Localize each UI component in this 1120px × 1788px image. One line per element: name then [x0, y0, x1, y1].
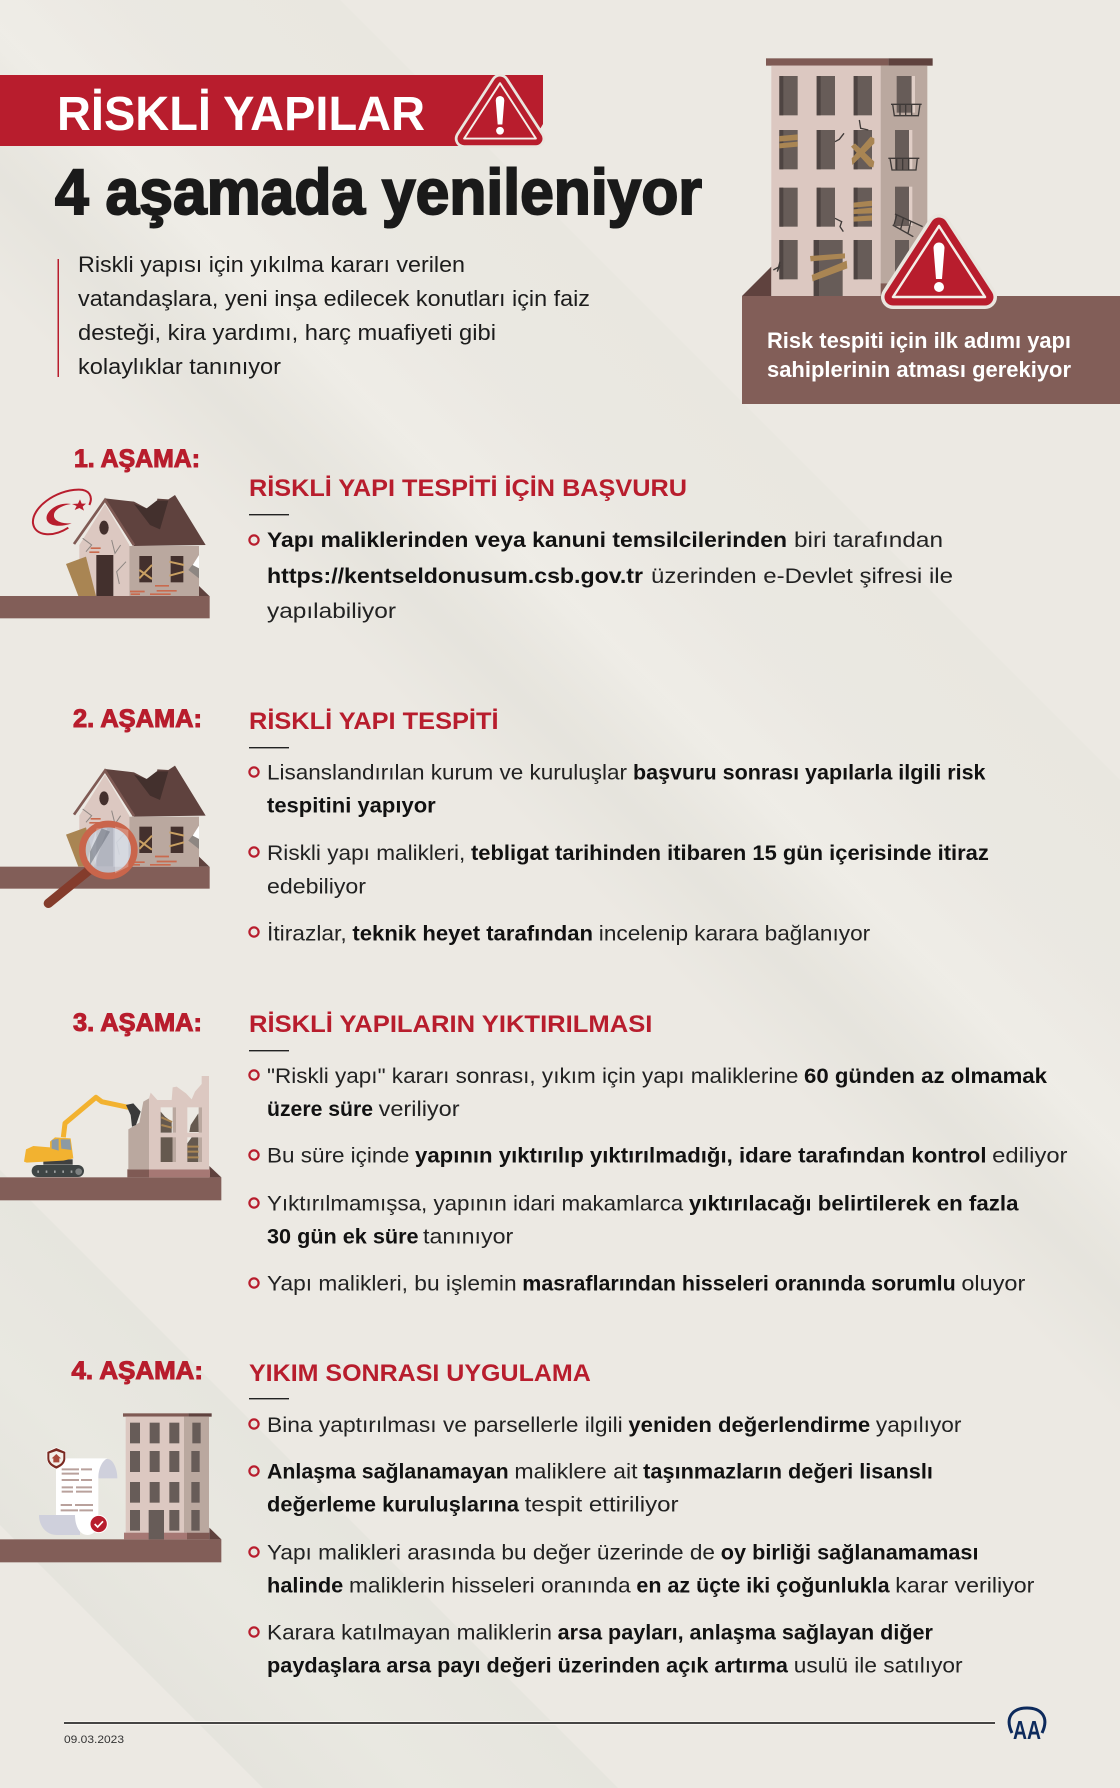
illustration: stage 2 house under magnifier — [0, 766, 210, 903]
step 4 text block: taşınmazların değeri lisanslı — [643, 1460, 933, 1484]
step 1 text block — [249, 528, 953, 623]
step 3 text block: Yapı malikleri, bu işlemin — [267, 1271, 517, 1295]
illustration: damaged apartment building — [742, 58, 933, 296]
step 2 text block: incelenip karara bağlanıyor — [599, 921, 870, 945]
icon: house shield — [47, 1448, 66, 1469]
step 2 text block: başvuru sonrası yapılarla ilgili risk — [633, 760, 986, 784]
step 4 text block: yapılıyor — [876, 1413, 961, 1437]
step 3 text block: tanınıyor — [423, 1225, 513, 1249]
step 4 text block: maliklere ait — [514, 1460, 638, 1484]
stage 3 label: 3. AŞAMA: — [73, 1009, 202, 1037]
stage 4 label: 4. AŞAMA: — [72, 1357, 203, 1385]
step 4 text block: halinde — [267, 1574, 343, 1598]
step 4 text block: Anlaşma sağlanamayan — [267, 1460, 509, 1484]
step 3 text block: masraflarından hisseleri oranında sorumlu — [522, 1271, 956, 1295]
icon: banner warning triangle — [464, 83, 536, 139]
intro paragraph: Riskli yapısı için yıkılma kararı verilen — [78, 252, 465, 277]
step 4 text block: en az üçte iki çoğunlukla — [636, 1574, 891, 1598]
step 3 text block: oluyor — [961, 1271, 1025, 1295]
step 4 text block: Yapı malikleri arasında bu değer üzerinde de — [267, 1541, 715, 1565]
step 1 heading: RİSKLİ YAPI TESPİTİ İÇİN BAŞVURU — [249, 475, 687, 502]
step 4 text block: Karara katılmayan maliklerin — [267, 1620, 552, 1644]
step 1 text block: https://kentseldonusum.csb.gov.tr — [267, 564, 644, 588]
step 4 text block: karar veriliyor — [895, 1574, 1034, 1598]
ruined building — [128, 1076, 209, 1169]
stage 2 label: 2. AŞAMA: — [73, 705, 202, 733]
step 3 text block: ediliyor — [992, 1144, 1068, 1168]
step 4 heading: YIKIM SONRASI UYGULAMA — [249, 1360, 591, 1387]
date: 09.03.2023 — [64, 1734, 124, 1746]
icon: ministry emblem — [33, 490, 91, 534]
panel background — [742, 296, 1120, 404]
step 3 text block: Yıktırılmamışsa, yapının idari makamlarca — [267, 1192, 683, 1216]
banner title text: RİSKLİ YAPILAR — [57, 88, 425, 141]
step 4 text block: değerleme kuruluşlarına — [267, 1493, 520, 1517]
step 1 text block: yapılabiliyor — [267, 599, 396, 623]
step 2 heading: RİSKLİ YAPI TESPİTİ — [249, 708, 498, 735]
excavator — [24, 1097, 141, 1177]
document — [39, 1448, 117, 1535]
intro paragraph — [58, 252, 590, 379]
step 4 text block: yeniden değerlendirme — [628, 1413, 870, 1437]
step 1 text block: biri tarafından — [794, 528, 943, 552]
step 3 text block: Bu süre içinde — [267, 1144, 409, 1168]
panel text: Risk tespiti için ilk adımı yapı — [767, 328, 1071, 353]
icon: AA logo — [1009, 1708, 1045, 1745]
step 2 text block: Riskli yapı malikleri, — [267, 841, 465, 865]
illustration: stage 3 excavator demolishing building — [0, 1076, 221, 1200]
step 2 text block: edebiliyor — [267, 875, 366, 899]
step 2 text block: tebligat tarihinden itibaren 15 gün içerisinde itiraz — [471, 841, 989, 865]
step 2 text block: teknik heyet tarafından — [352, 921, 593, 945]
intro paragraph: kolaylıklar tanınıyor — [78, 354, 282, 379]
title banner — [0, 75, 543, 146]
step 3 text block: "Riskli yapı" kararı sonrası, yıkım için yapı maliklerine — [267, 1064, 798, 1088]
step 4 text block: tespit ettiriliyor — [525, 1493, 679, 1517]
intro paragraph: desteği, kira yardımı, harç muafiyeti gibi — [78, 320, 496, 345]
step 3 text block: yapının yıktırılıp yıktırılmadığı, idare tarafından kontrol — [415, 1144, 986, 1168]
new building — [123, 1413, 212, 1539]
step 3 text block: veriliyor — [379, 1097, 460, 1121]
step 3 text block: yıktırılacağı belirtilerek en fazla — [689, 1192, 1020, 1216]
footer — [64, 1708, 1045, 1746]
illustration: stage 1 damaged house with emblem — [0, 490, 210, 618]
step 4 text block: usulü ile satılıyor — [794, 1654, 963, 1678]
step 4 text block: oy birliği sağlanamaması — [721, 1541, 978, 1565]
step 3 text block: 60 günden az olmamak — [804, 1064, 1047, 1088]
icon: check badge — [90, 1515, 107, 1533]
step 3 text block: üzere süre — [267, 1097, 373, 1121]
step 2 text block — [249, 760, 989, 945]
main heading: 4 aşamada yenileniyor — [55, 156, 702, 228]
illustration: stage 4 new building and document — [0, 1413, 221, 1562]
icon: large warning triangle — [893, 226, 985, 297]
step 2 text block: İtirazlar, — [267, 921, 347, 945]
step 3 text block: 30 gün ek süre — [267, 1225, 419, 1249]
step 3 heading: RİSKLİ YAPILARIN YIKTIRILMASI — [249, 1011, 652, 1038]
step 4 text block: paydaşlara arsa payı değeri üzerinden açık artırma — [267, 1654, 789, 1678]
step 1 text block: üzerinden e-Devlet şifresi ile — [651, 564, 953, 588]
step 1 text block: Yapı maliklerinden veya kanuni temsilcilerinden — [267, 528, 787, 552]
icon: AA logo: AA — [1013, 1715, 1041, 1745]
step 2 text block: Lisanslandırılan kurum ve kuruluşlar — [267, 760, 627, 784]
step 4 text block — [249, 1413, 1034, 1678]
stage 1 label: 1. AŞAMA: — [74, 445, 200, 473]
panel text — [767, 328, 1071, 382]
intro paragraph: vatandaşlara, yeni inşa edilecek konutları için faiz — [78, 286, 590, 311]
step 4 text block: Bina yaptırılması ve parsellerle ilgili — [267, 1413, 623, 1437]
step 4 text block: arsa payları, anlaşma sağlayan diğer — [558, 1620, 934, 1644]
panel text: sahiplerinin atması gerekiyor — [767, 357, 1071, 382]
icon: magnifying glass — [48, 824, 134, 903]
step 4 text block: maliklerin hisseleri oranında — [349, 1574, 631, 1598]
step 3 text block — [249, 1064, 1067, 1295]
panel: risk notice with damaged building — [742, 58, 1120, 404]
step 2 text block: tespitini yapıyor — [267, 794, 436, 818]
